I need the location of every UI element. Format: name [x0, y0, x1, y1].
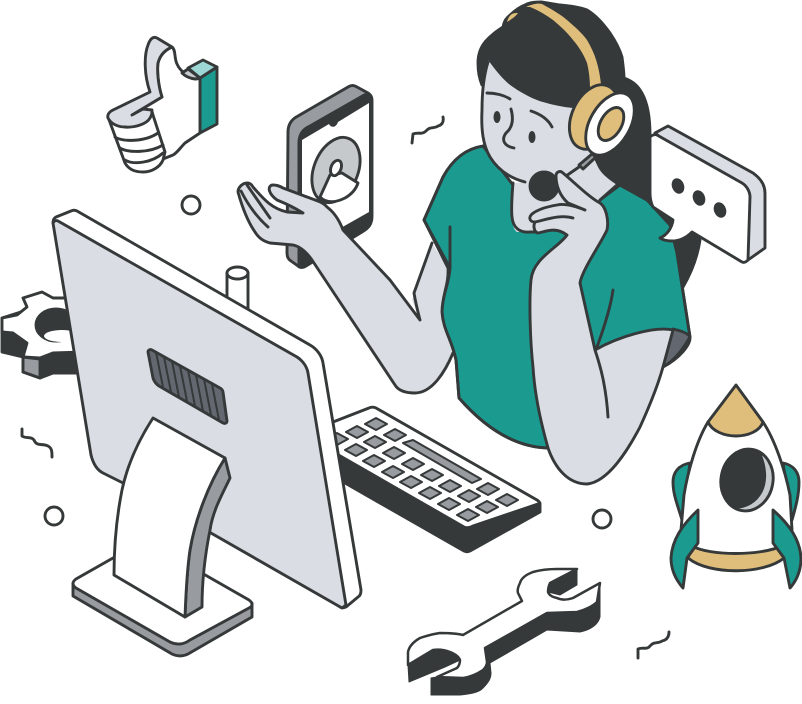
decorative circle [182, 196, 200, 214]
wrench face [408, 569, 600, 678]
sleeve underside [663, 329, 690, 367]
rocket front fins [671, 510, 801, 588]
monitor [53, 210, 361, 656]
left arm and hand [238, 183, 453, 393]
right arm and hand [450, 172, 673, 484]
squiggle [412, 117, 443, 143]
squiggle [638, 632, 669, 658]
rocket back fins [673, 463, 799, 520]
hair back [478, 2, 700, 287]
monitor bezel [53, 210, 361, 608]
icon: rocket [671, 385, 801, 588]
rocket nose cone [708, 385, 763, 436]
stand [73, 418, 252, 656]
rocket gold ring [688, 546, 784, 571]
rocket window [716, 445, 778, 515]
shirt [424, 146, 690, 448]
phone [287, 86, 372, 268]
shirt outline left [424, 146, 690, 448]
rocket body [681, 422, 792, 565]
speech bubble [650, 126, 765, 262]
wrench shadow [408, 569, 600, 695]
headset [507, 4, 644, 176]
vent [148, 350, 227, 423]
keys [326, 418, 518, 521]
microphone [530, 172, 558, 200]
squiggle [22, 429, 52, 457]
decorative circle [593, 510, 611, 528]
face features [487, 93, 552, 148]
head and neck [482, 60, 617, 232]
decorative circle [45, 507, 63, 525]
cylinder behind monitor [227, 267, 248, 325]
icon: gear [2, 292, 90, 378]
monitor back panel [53, 221, 346, 608]
icon: thumbs up [108, 37, 217, 172]
base [73, 560, 252, 656]
keyboard [326, 407, 540, 552]
icon: wrench [408, 569, 600, 695]
